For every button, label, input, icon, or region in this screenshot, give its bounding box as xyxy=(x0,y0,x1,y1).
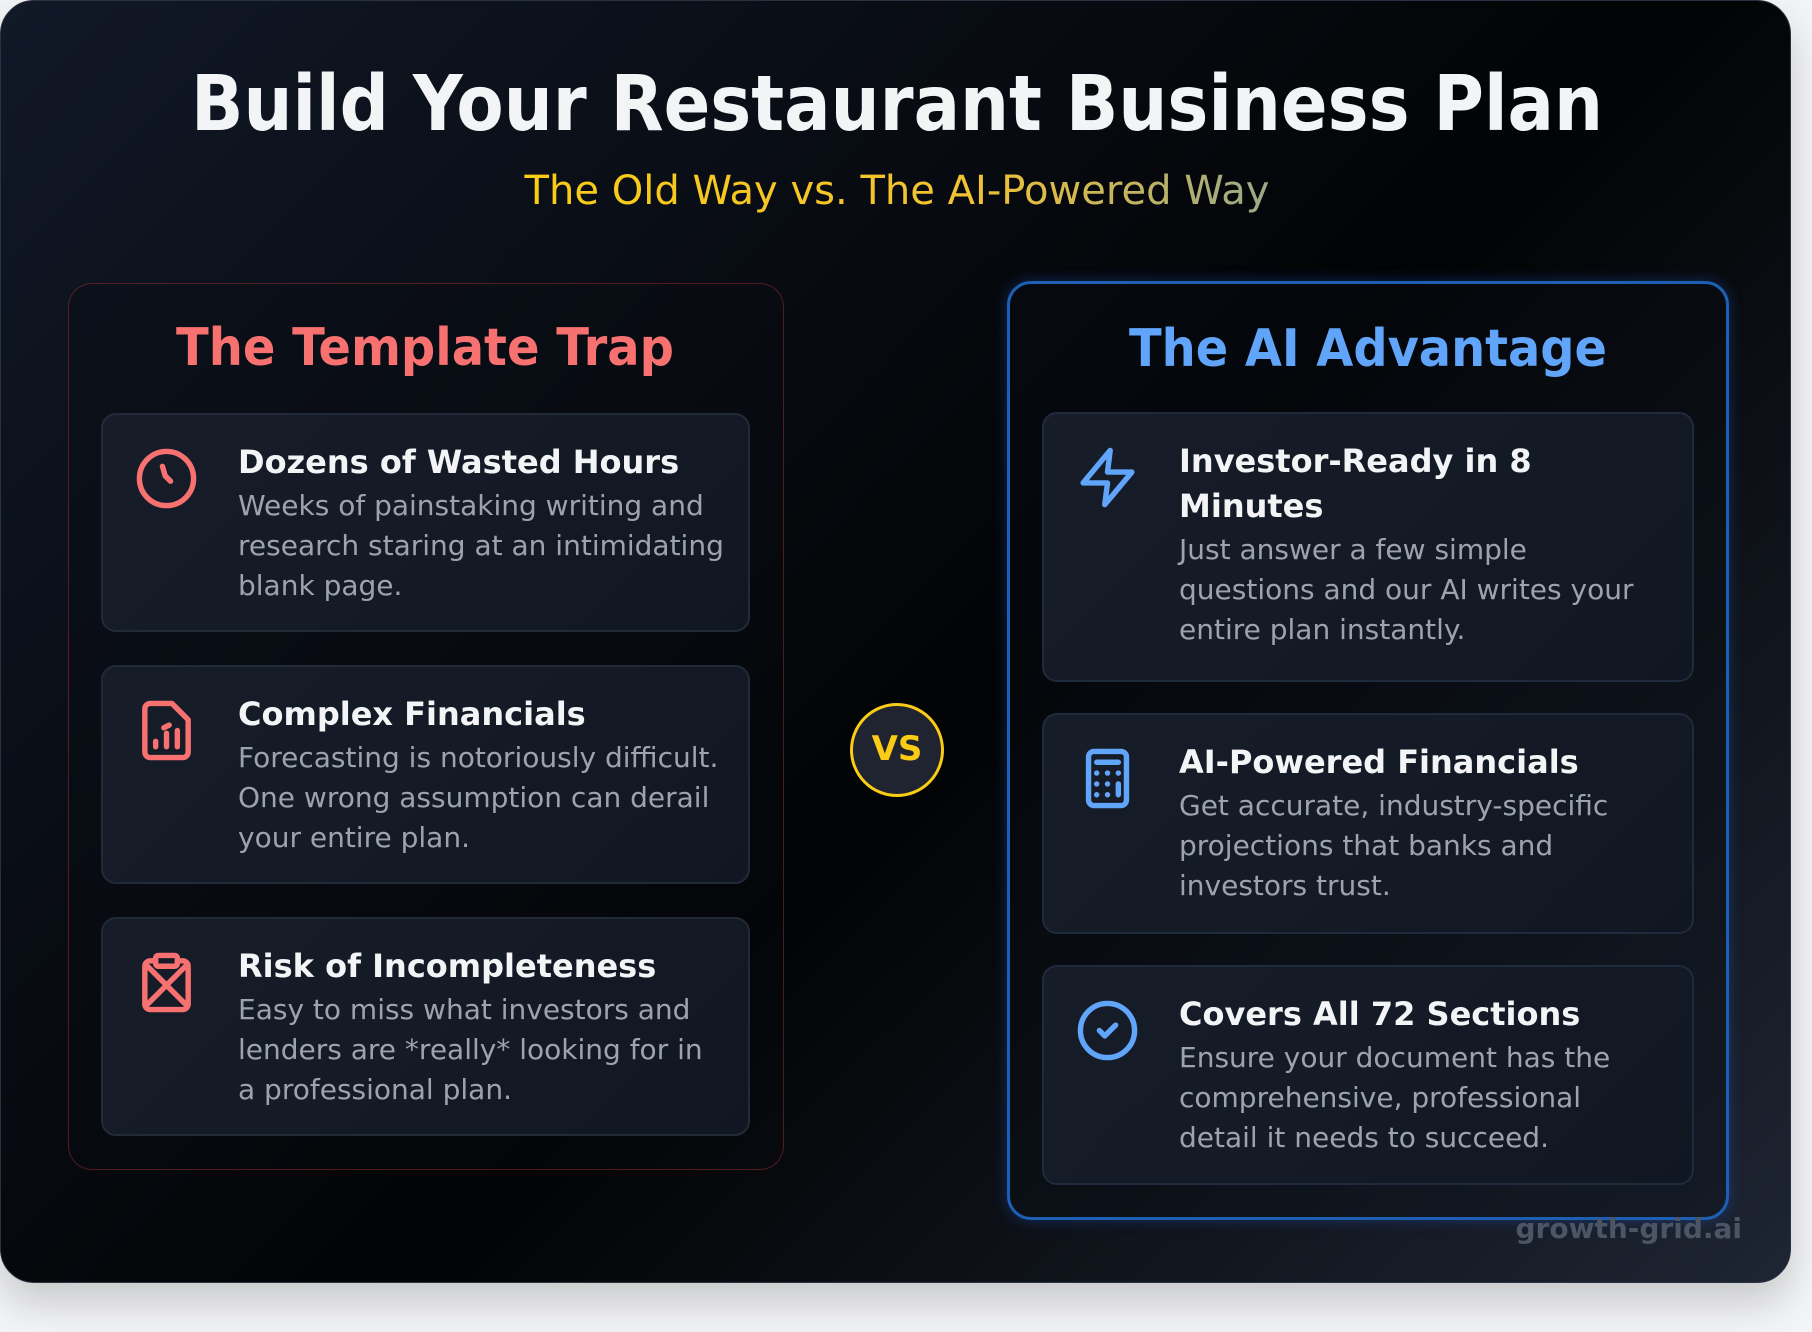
text: Ensure your document has the comprehensive, professional detail it needs to succeed. xyxy=(1179,1041,1610,1154)
title xyxy=(191,60,1603,214)
title: Build Your Restaurant Business Plan xyxy=(191,60,1603,149)
text: Just answer a few simple questions and our AI writes your entire plan instantly. xyxy=(1179,533,1633,646)
text: Covers All 72 Sections xyxy=(1179,995,1580,1033)
icon: clipboard x xyxy=(142,952,191,1012)
icon: clock xyxy=(136,448,196,508)
text: Easy to miss what investors and lenders are *really* looking for in a professional plan. xyxy=(238,993,703,1106)
text: Investor-Ready in 8 xyxy=(1179,442,1532,480)
panel: template trap xyxy=(68,283,784,1170)
icon: calculator xyxy=(1086,748,1130,808)
card: complex financials xyxy=(101,665,750,884)
icon: check circle xyxy=(1078,1000,1138,1060)
card: wasted hours xyxy=(101,413,750,632)
card: investor ready xyxy=(1042,412,1694,682)
icon: file chart xyxy=(142,700,191,760)
watermark: growth-grid.ai xyxy=(1515,1212,1742,1245)
text: Dozens of Wasted Hours xyxy=(238,443,679,481)
card: AI financials xyxy=(1042,713,1694,934)
text: Weeks of painstaking writing and research staring at an intimidating blank page. xyxy=(238,489,724,602)
vs badge: VS xyxy=(872,729,922,769)
heading: The AI Advantage: The AI Advantage xyxy=(1129,319,1607,379)
heading: The Template Trap: The Template Trap xyxy=(176,318,674,378)
text: Minutes xyxy=(1179,487,1323,525)
panel: AI advantage xyxy=(1007,281,1729,1220)
title: The Old Way vs. The AI-Powered Way xyxy=(523,168,1270,214)
text: Risk of Incompleteness xyxy=(238,947,656,985)
icon: lightning xyxy=(1080,448,1135,508)
vs badge xyxy=(850,703,944,797)
text xyxy=(1178,442,1634,646)
card: incompleteness xyxy=(101,917,750,1136)
card: 72 sections xyxy=(1042,965,1694,1185)
text: AI-Powered Financials xyxy=(1179,743,1579,781)
text: Forecasting is notoriously difficult. One wrong assumption can derail your entire plan. xyxy=(238,741,718,854)
text: Get accurate, industry-specific projections that banks and investors trust. xyxy=(1179,789,1608,902)
text: Complex Financials xyxy=(238,695,586,733)
